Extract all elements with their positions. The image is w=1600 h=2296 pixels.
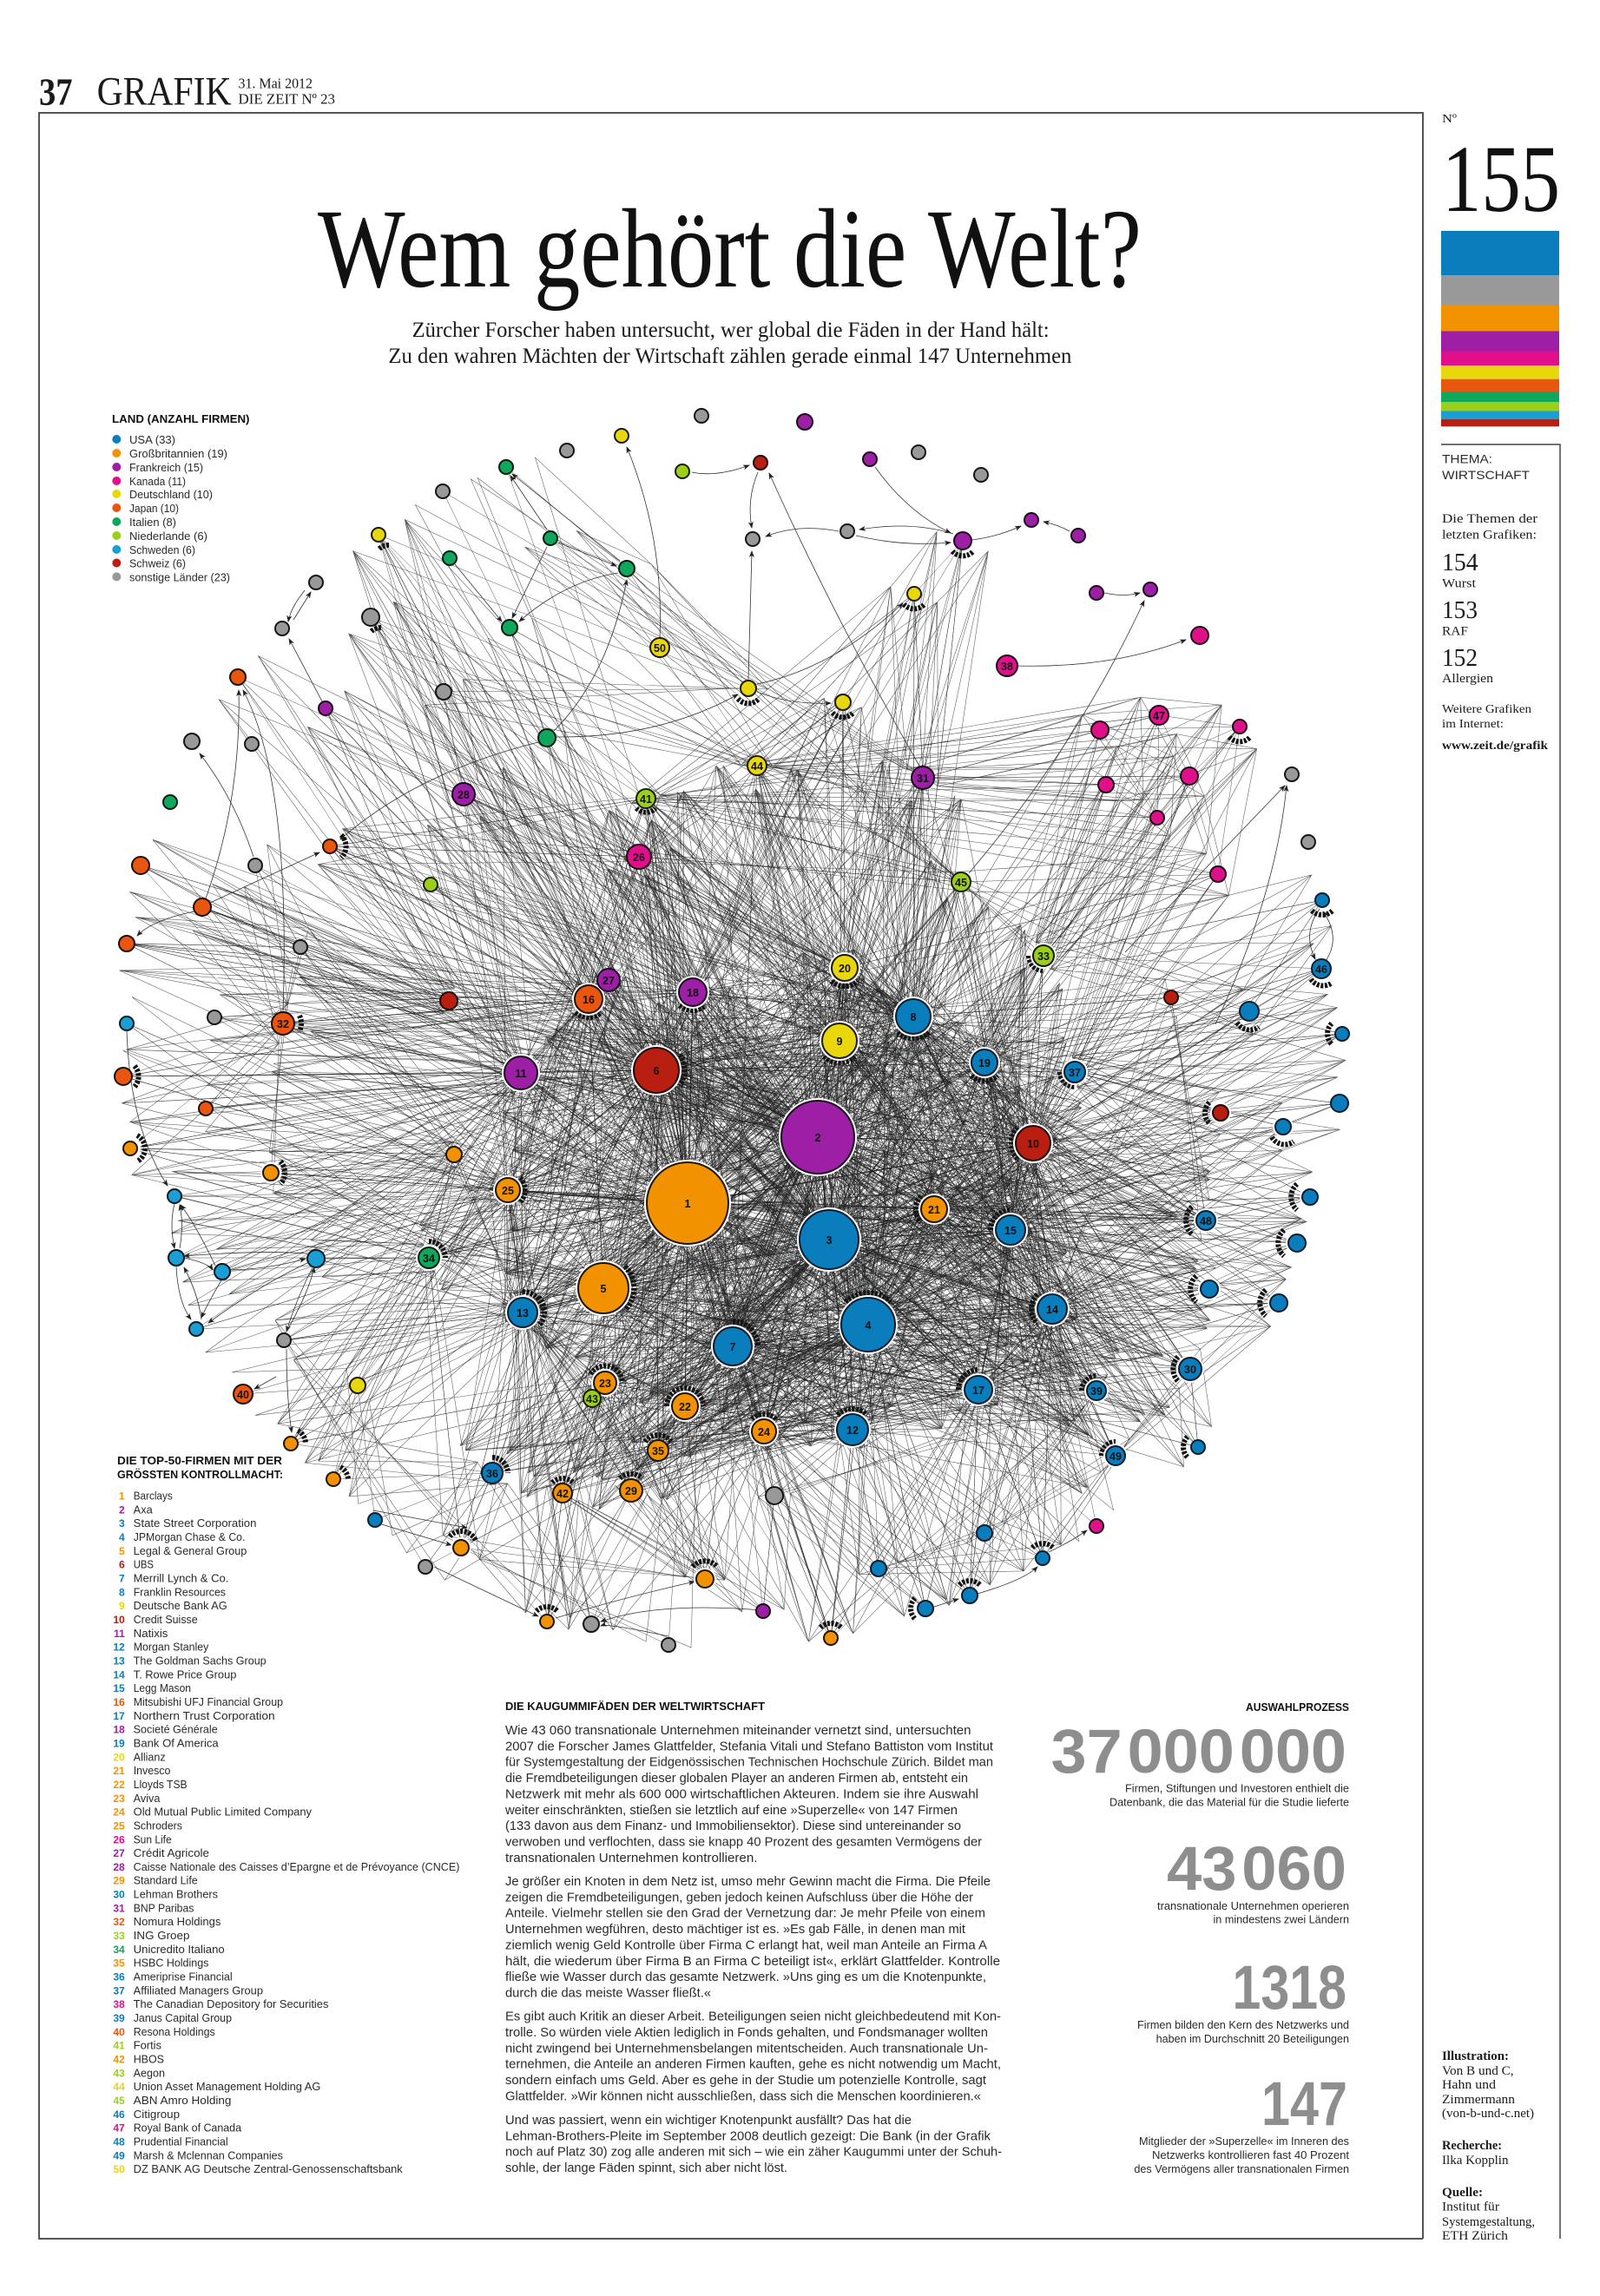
stat: 147: Mitglieder der »Superzelle« im Inneren des (1139, 2135, 1349, 2148)
list: Top 50 firms: 13 (113, 1655, 125, 1667)
list: Top 50 firms: Crédit Agricole (134, 1847, 209, 1859)
page header: 31. Mai 2012 (238, 76, 313, 92)
node rank numbers: 7 (730, 1341, 736, 1353)
stat: 147: des Vermögens aller transnationalen Firmen (1134, 2163, 1349, 2175)
list: Top 50 firms: HBOS (134, 2054, 164, 2066)
list: Top 50 firms: Barclays (134, 1490, 173, 1502)
node rank numbers: 49 (1109, 1451, 1122, 1463)
subtitle: Zu den wahren Mächten der Wirtschaft zählen gerade einmal 147 Unternehmen (388, 345, 1072, 368)
list: Top 50 firms: Nomura Holdings (134, 1916, 221, 1928)
list: Top 50 firms: Citigroup (134, 2109, 180, 2121)
list: Top 50 firms: Legg Mason (134, 1682, 191, 1694)
list: Top 50 firms: 5 (119, 1545, 125, 1557)
article: Die Kaugummifäden der Weltwirtschaft: Je größer ein Knoten in dem Netz ist, umso mehr Gewinn macht die Firma. Die Pfeile (505, 1875, 991, 1889)
sidebar: credits: Institut für (1442, 2200, 1499, 2214)
article: Die Kaugummifäden der Weltwirtschaft: Und was passiert, wenn ein wichtiger Knotenpunkt ausfällt? Das hat die (505, 2114, 912, 2128)
legend: Land (Anzahl Firmen): Kanada (11) (129, 476, 186, 488)
list: Top 50 firms: 38 (113, 1998, 125, 2010)
list: Top 50 firms: 24 (113, 1806, 125, 1819)
list: Top 50 firms: DIE TOP-50-FIRMEN MIT DER (117, 1454, 283, 1467)
list: Top 50 firms: 33 (113, 1930, 125, 1942)
list: Top 50 firms: 48 (113, 2135, 125, 2148)
list: Top 50 firms: 29 (113, 1875, 125, 1887)
sidebar: topic and previous graphics: 153 (1442, 597, 1478, 624)
node rank numbers: 12 (846, 1424, 859, 1437)
node rank numbers: 50 (654, 642, 666, 655)
node rank numbers: 10 (1027, 1138, 1039, 1150)
node rank numbers: 41 (640, 793, 652, 806)
page header (39, 69, 335, 114)
sidebar: topic and previous graphics: Wurst (1442, 576, 1477, 590)
nodes: Kanada (627, 627, 1247, 1533)
list: Top 50 firms: 23 (113, 1793, 125, 1805)
title: Wem gehört die Welt? (318, 187, 1142, 312)
node rank numbers: 21 (928, 1204, 940, 1216)
list: Top 50 firms: 3 (119, 1517, 125, 1530)
node rank numbers: 15 (1004, 1225, 1017, 1237)
list: Top 50 firms: ABN Amro Holding (134, 2095, 231, 2107)
list: Top 50 firms: Aegon (134, 2067, 165, 2079)
list: Top 50 firms: 14 (113, 1668, 125, 1681)
sidebar: topic and previous graphics: 154 (1442, 549, 1478, 576)
node rank numbers: 34 (423, 1253, 435, 1265)
nodes: sonstige Länder (184, 409, 1315, 1652)
list: Top 50 firms: 6 (119, 1559, 125, 1571)
edges: dense core (508, 968, 1052, 1431)
page header: DIE ZEIT Nº 23 (238, 91, 335, 108)
node rank numbers: 33 (1037, 951, 1050, 963)
article: Die Kaugummifäden der Weltwirtschaft: Es gibt auch Kritik an dieser Arbeit. Beteiligungen seien nicht gleichbedeutend mit Kon- (505, 2010, 1001, 2024)
sidebar: topic and previous graphics: WIRTSCHAFT (1442, 468, 1530, 482)
list: Top 50 firms: 22 (113, 1779, 125, 1791)
article: Die Kaugummifäden der Weltwirtschaft: sohle, der lange Fäden spinnt, sich aber nicht löst. (505, 2161, 787, 2175)
list: Top 50 firms: Invesco (134, 1765, 170, 1777)
list: Top 50 firms: 49 (113, 2149, 125, 2161)
list: Top 50 firms: 43 (113, 2067, 125, 2079)
stat: 43 060: in mindestens zwei Ländern (1214, 1913, 1349, 1925)
node rank numbers: 23 (599, 1378, 611, 1390)
list: Top 50 firms: Merrill Lynch & Co. (134, 1573, 228, 1585)
list: Top 50 firms: T. Rowe Price Group (134, 1668, 236, 1681)
stat: 1318: 1318 (1233, 1954, 1347, 2023)
list: Top 50 firms: 17 (113, 1710, 125, 1722)
list: Top 50 firms: Unicredito Italiano (134, 1944, 225, 1956)
node rank numbers: 36 (486, 1468, 498, 1480)
list: Top 50 firms: The Canadian Depository for Securities (134, 1998, 328, 2010)
list: Top 50 firms: Deutsche Bank AG (134, 1600, 227, 1612)
article: Die Kaugummifäden der Weltwirtschaft: Anteile. Vielmehr stellen sie den Grad der Vernetzung dar: Je mehr Pfeile von einem (505, 1907, 985, 1921)
stat: 43 060: 43 060 (1167, 1835, 1347, 1904)
legend: Land (Anzahl Firmen): sonstige Länder (23) (129, 571, 230, 583)
page header: 37 (39, 70, 73, 113)
sidebar: topic and previous graphics: letzten Grafiken: (1442, 528, 1537, 542)
sidebar: topic and previous graphics: www.zeit.de/grafik (1442, 740, 1548, 753)
article: Die Kaugummifäden der Weltwirtschaft: ziemlich wenig Geld Kontrolle über Firma C erlangt hat, weil man Anteile an Firma A (505, 1938, 987, 1952)
node rank numbers: 5 (601, 1283, 607, 1295)
nodes: Schweiz (440, 456, 1228, 1161)
stats: Auswahlprozess: AUSWAHLPROZESS (1246, 1701, 1349, 1714)
sidebar: topic and previous graphics: 152 (1442, 645, 1478, 672)
list: Top 50 firms: 4 (119, 1531, 125, 1543)
nodes: Italien (163, 460, 635, 1268)
list: Top 50 firms: 27 (113, 1847, 125, 1859)
node rank numbers: 46 (1315, 964, 1327, 976)
article: Die Kaugummifäden der Weltwirtschaft: nicht zwingend bei Unternehmensbelangen mitentscheiden. Auch transnationale Un- (505, 2042, 988, 2056)
article: Die Kaugummifäden der Weltwirtschaft: Lehman-Brothers-Pleite im September 2008 deutlich gezeigt: Die Bank (in der Grafik (505, 2129, 991, 2143)
list: Top 50 firms: Credit Suisse (134, 1614, 198, 1626)
nodes: Großbritannien (123, 1141, 947, 1645)
list: Top 50 firms: 8 (119, 1586, 125, 1598)
node rank numbers: 43 (586, 1393, 598, 1405)
node rank numbers: 29 (625, 1485, 637, 1497)
list: Top 50 firms: 7 (119, 1573, 125, 1585)
node rank numbers: 14 (1046, 1304, 1058, 1316)
article: Die Kaugummifäden der Weltwirtschaft: Wie 43 060 transnationale Unternehmen miteinander vernetzt sind, untersuchten (505, 1724, 971, 1738)
sidebar: issue number: Nº (1442, 113, 1458, 126)
node rank numbers: 13 (517, 1307, 529, 1319)
list: Top 50 firms: 19 (113, 1737, 125, 1749)
nodes: Frankreich (319, 414, 1157, 1618)
list: Top 50 firms: Mitsubishi UFJ Financial Group (134, 1696, 283, 1708)
node rank numbers: 27 (602, 975, 615, 987)
node rank numbers: 24 (758, 1426, 770, 1438)
list: Top 50 firms: 45 (113, 2095, 125, 2107)
list: Top 50 firms: Bank Of America (134, 1737, 219, 1749)
list: Top 50 firms: GRÖSSTEN KONTROLLMACHT: (117, 1468, 283, 1481)
node rank numbers: 38 (1001, 661, 1013, 673)
article: Die Kaugummifäden der Weltwirtschaft: zeigen die Fremdbeteiligungen, geben jedoch keinen Aufschluss über die Höhe der (505, 1891, 973, 1905)
sidebar: topic and previous graphics: Die Themen der (1442, 512, 1537, 526)
list: Top 50 firms (113, 1454, 459, 2175)
list: Top 50 firms: 18 (113, 1724, 125, 1736)
list: Top 50 firms: 15 (113, 1682, 125, 1694)
nodes: Schweden (120, 1016, 325, 1336)
node rank numbers: 39 (1090, 1385, 1103, 1398)
list: Top 50 firms: 30 (113, 1889, 125, 1901)
sidebar: topic and previous graphics (1442, 452, 1548, 753)
article: Die Kaugummifäden der Weltwirtschaft: fließe wie Wasser durch das gesamte Netzwerk. »Uns ging es um die Knotenpunkte, (505, 1970, 986, 1984)
stat: 147: Netzwerks kontrollieren fast 40 Prozent (1152, 2149, 1350, 2161)
article: Die Kaugummifäden der Weltwirtschaft: transnationalen Unternehmen kontrollieren. (505, 1852, 757, 1865)
list: Top 50 firms: 16 (113, 1696, 125, 1708)
node rank numbers: 18 (687, 987, 699, 999)
article: Die Kaugummifäden der Weltwirtschaft: (133 davon aus dem Finanz- und Immobiliensektor). Diese sind untereinander so (505, 1819, 961, 1833)
stat: 37 000 000: Firmen, Stiftungen und Investoren enthielt die (1125, 1783, 1349, 1795)
sidebar: credits: Hahn und (1442, 2078, 1497, 2092)
list: Top 50 firms: 25 (113, 1819, 125, 1832)
node rank numbers: 42 (556, 1488, 569, 1500)
list: Top 50 firms: 11 (114, 1628, 125, 1640)
node rank numbers: 37 (1069, 1067, 1081, 1079)
list: Top 50 firms: 9 (119, 1600, 125, 1612)
list: Top 50 firms: 12 (113, 1641, 125, 1654)
legend: Land (Anzahl Firmen): Japan (10) (129, 503, 179, 515)
edges: middle ring (283, 766, 1206, 1493)
article: Die Kaugummifäden der Weltwirtschaft: trolle. So würden viele Aktien lediglich in Fonds gehalten, und Fondsmanager wollten (505, 2026, 988, 2040)
list: Top 50 firms: Sun Life (134, 1833, 172, 1845)
legend: Land (Anzahl Firmen): Schweiz (6) (129, 557, 186, 569)
list: Top 50 firms: Allianz (134, 1751, 166, 1763)
list: Top 50 firms: Union Asset Management Holding AG (134, 2081, 320, 2093)
arrowhead clusters around nodes (135, 545, 1333, 1628)
list: Top 50 firms: 10 (113, 1614, 125, 1626)
node rank numbers: 2 (815, 1132, 821, 1144)
list: Top 50 firms: JPMorgan Chase & Co. (134, 1531, 245, 1543)
list: Top 50 firms: 2 (119, 1503, 125, 1516)
article: Die Kaugummifäden der Weltwirtschaft (504, 1700, 1002, 2175)
list: Top 50 firms: 1 (119, 1490, 125, 1502)
sidebar: topic and previous graphics: RAF (1442, 625, 1468, 639)
list: Top 50 firms: Marsh & Mclennan Companies (134, 2149, 283, 2161)
nodes: Deutschland (350, 429, 921, 1393)
article: Die Kaugummifäden der Weltwirtschaft: sondern einfach ums Geld. Aber es gehe in der Studie um potenzielle Kontrolle, sagt (505, 2074, 986, 2088)
peripheral curved arrows (127, 447, 1333, 1636)
stat: 1318 (1137, 1954, 1349, 2045)
sidebar: issue number: 155 (1442, 126, 1560, 232)
list: Top 50 firms: 36 (113, 1971, 125, 1984)
legend: Land (Anzahl Firmen): Deutschland (10) (129, 489, 213, 501)
list: Top 50 firms: 37 (113, 1984, 125, 1997)
stat: 147: 147 (1261, 2070, 1347, 2139)
list: Top 50 firms: State Street Corporation (134, 1517, 256, 1530)
node rank numbers: 47 (1153, 710, 1165, 722)
node rank numbers: 32 (277, 1018, 289, 1030)
node rank numbers: 19 (978, 1057, 991, 1069)
node rank numbers: 4 (866, 1319, 872, 1332)
article: Die Kaugummifäden der Weltwirtschaft: die Fremdbeteiligungen dieser globalen Player an anderen Firmen ab, entsteht ein (505, 1772, 968, 1786)
sidebar: credits: Quelle: (1442, 2186, 1483, 2200)
node rank numbers: 22 (679, 1401, 691, 1413)
node rank numbers: 6 (654, 1065, 660, 1077)
list: Top 50 firms: Franklin Resources (134, 1586, 226, 1598)
list: Top 50 firms: 32 (113, 1916, 125, 1928)
node rank numbers: 40 (237, 1389, 249, 1401)
network graph (95, 409, 1367, 1671)
sidebar: colour proportion bar (1441, 231, 1559, 426)
list: Top 50 firms: HSBC Holdings (134, 1957, 208, 1970)
list: Top 50 firms: Standard Life (134, 1875, 198, 1887)
list: Top 50 firms: ING Groep (134, 1930, 189, 1942)
list: Top 50 firms: 41 (113, 2040, 125, 2052)
legend: Land (Anzahl Firmen): USA (33) (129, 434, 175, 446)
stats: Auswahlprozess (1050, 1701, 1350, 2175)
list: Top 50 firms: 40 (113, 2026, 125, 2038)
edges: extra density layers (95, 441, 1367, 1671)
article: Die Kaugummifäden der Weltwirtschaft: Unternehmen wegführen, desto mächtiger ist es. »Es gab Fälle, in denen man mit (505, 1923, 965, 1937)
node rank numbers: 3 (826, 1234, 833, 1247)
node rank numbers: 9 (837, 1036, 843, 1048)
list: Top 50 firms: Royal Bank of Canada (134, 2122, 241, 2135)
list: Top 50 firms: 39 (113, 2012, 125, 2024)
node rank numbers (237, 642, 1327, 1500)
sidebar: credits: ETH Zürich (1442, 2229, 1509, 2243)
list: Top 50 firms: 47 (113, 2122, 125, 2135)
subtitle (388, 319, 1072, 368)
node rank numbers: 31 (917, 773, 929, 785)
node rank numbers: 16 (583, 994, 595, 1006)
list: Top 50 firms: Legal & General Group (134, 1545, 247, 1557)
list: Top 50 firms: 46 (113, 2109, 125, 2121)
node rank numbers: 44 (751, 760, 763, 773)
list: Top 50 firms: Lloyds TSB (134, 1779, 188, 1791)
list: Top 50 firms: 28 (113, 1861, 125, 1873)
sidebar: credits: Von B und C, (1442, 2064, 1514, 2078)
legend: Land (Anzahl Firmen): Großbritannien (19) (129, 448, 227, 460)
node rank numbers: 26 (633, 852, 645, 864)
list: Top 50 firms: Caisse Nationale des Caisses d’Epargne et de Prévoyance (CNCE) (134, 1861, 459, 1873)
list: Top 50 firms: Janus Capital Group (134, 2012, 232, 2024)
list: Top 50 firms: BNP Paribas (134, 1902, 194, 1914)
stat: 43 060: transnationale Unternehmen operieren (1157, 1900, 1349, 1912)
list: Top 50 firms: Aviva (134, 1793, 160, 1805)
sidebar: topic and previous graphics: Weitere Grafiken (1442, 703, 1531, 716)
article: Die Kaugummifäden der Weltwirtschaft: durch die das meiste Wasser fließt.« (505, 1986, 711, 2000)
sidebar: credits: Zimmermann (1442, 2093, 1516, 2107)
legend: Land (Anzahl Firmen): Frankreich (15) (129, 462, 203, 474)
list: Top 50 firms: The Goldman Sachs Group (134, 1655, 267, 1667)
sidebar: credits: Recherche: (1442, 2139, 1502, 2153)
node rank numbers: 30 (1184, 1364, 1196, 1376)
sidebar: topic and previous graphics: THEMA: (1442, 452, 1492, 466)
article: Die Kaugummifäden der Weltwirtschaft: 2007 die Forscher James Glattfelder, Stefania Vitali und Stefano Battiston vom Institut (505, 1740, 993, 1753)
white halos around top-50 nodes (120, 943, 1320, 1590)
node rank numbers: 35 (652, 1445, 664, 1457)
sidebar: credits: Illustration: (1442, 2049, 1509, 2063)
list: Top 50 firms: Resona Holdings (134, 2026, 215, 2038)
sidebar: topic and previous graphics: Allergien (1442, 672, 1494, 686)
list: Top 50 firms: Societé Générale (134, 1724, 218, 1736)
stat: 1318: haben im Durchschnitt 20 Beteiligungen (1156, 2033, 1349, 2045)
legend: Land (Anzahl Firmen): Italien (8) (129, 516, 176, 529)
edges: outer fans (123, 467, 1342, 1645)
legend: Land (Anzahl Firmen) (112, 412, 250, 583)
node rank numbers: 25 (502, 1185, 514, 1197)
article: Die Kaugummifäden der Weltwirtschaft: hält, die wiederum über Firma B an Firma C beteiligt ist«, erklärt Glattfelder. Kontrolle (505, 1955, 1000, 1969)
list: Top 50 firms: 21 (113, 1765, 125, 1777)
list: Top 50 firms: 50 (113, 2163, 125, 2175)
stat: 43 060 (1157, 1835, 1349, 1925)
list: Top 50 firms: Schroders (134, 1819, 182, 1832)
legend: Land (Anzahl Firmen): LAND (ANZAHL FIRMEN) (112, 412, 250, 425)
article: Die Kaugummifäden der Weltwirtschaft: verwoben und verflochten, dass sie knapp 40 Prozent des gesamten Vermögens der (505, 1835, 982, 1849)
list: Top 50 firms: 31 (113, 1902, 125, 1914)
sidebar: credits: (von-b-und-c.net) (1442, 2107, 1534, 2121)
list: Top 50 firms: 35 (113, 1957, 125, 1970)
list: Top 50 firms: Fortis (134, 2040, 161, 2052)
nodes: USA (368, 893, 1349, 1616)
article: Die Kaugummifäden der Weltwirtschaft: Netzwerk mit mehr als 600 000 wirtschaftlichen Akteuren. Indem sie ihre Auswahl (505, 1787, 978, 1801)
list: Top 50 firms: Affiliated Managers Group (134, 1984, 263, 1997)
list: Top 50 firms: 26 (113, 1833, 125, 1845)
stat: 37 000 000: Datenbank, die das Material für die Studie lieferte (1109, 1797, 1349, 1809)
list: Top 50 firms: Morgan Stanley (134, 1641, 209, 1654)
list: Top 50 firms: Northern Trust Corporation (134, 1710, 275, 1722)
list: Top 50 firms: Natixis (134, 1628, 168, 1640)
sidebar: credits: Systemgestaltung, (1442, 2215, 1535, 2229)
nodes: Japan (115, 669, 602, 1404)
list: Top 50 firms: Lehman Brothers (134, 1889, 218, 1901)
list: Top 50 firms: 42 (113, 2054, 125, 2066)
stat: 147 (1134, 2070, 1350, 2175)
list: Top 50 firms: Ameriprise Financial (134, 1971, 233, 1984)
sidebar frame (1441, 444, 1560, 2239)
sidebar: credits (1442, 2049, 1535, 2243)
list: Top 50 firms: 20 (113, 1751, 125, 1763)
node rank numbers: 17 (972, 1385, 984, 1397)
list: Top 50 firms: 34 (113, 1944, 125, 1956)
list: Top 50 firms: DZ BANK AG Deutsche Zentral-Genossenschaftsbank (134, 2163, 403, 2175)
sidebar: credits: Ilka Kopplin (1442, 2154, 1509, 2168)
stat: 1318: Firmen bilden den Kern des Netzwerks und (1137, 2019, 1349, 2031)
list: Top 50 firms: UBS (134, 1559, 154, 1571)
nodes: Niederlande (424, 464, 1054, 1407)
article: Die Kaugummifäden der Weltwirtschaft: Glattfelder. »Wir können nicht ausschließen, dass sich die Menschen koordinieren.« (505, 2089, 981, 2103)
subtitle: Zürcher Forscher haben untersucht, wer global die Fäden in der Hand hält: (412, 319, 1050, 342)
legend: Land (Anzahl Firmen): Niederlande (6) (129, 530, 207, 543)
list: Top 50 firms: Axa (134, 1503, 153, 1516)
article: Die Kaugummifäden der Weltwirtschaft: ternehmen, die Anteile an anderen Firmen kauften, gehe es nicht notwendig um Macht, (505, 2058, 1001, 2072)
article: Die Kaugummifäden der Weltwirtschaft: DIE KAUGUMMIFÄDEN DER WELTWIRTSCHAFT (505, 1700, 765, 1713)
node rank numbers: 28 (458, 789, 470, 801)
legend: Land (Anzahl Firmen): Schweden (6) (129, 544, 195, 556)
node rank numbers: 8 (911, 1011, 917, 1023)
node rank numbers: 48 (1200, 1215, 1212, 1227)
article: Die Kaugummifäden der Weltwirtschaft: noch auf Platz 30) zog alle anderen mit sich – wie ein zäher Kaugummi unter der Schuh- (505, 2146, 1002, 2160)
list: Top 50 firms: 44 (113, 2081, 125, 2093)
article: Die Kaugummifäden der Weltwirtschaft: für Systemgestaltung der Eidgenössischen Technischen Hochschule Zürich. Bildet man (505, 1756, 993, 1770)
page header: GRAFIK (97, 69, 232, 114)
article: Die Kaugummifäden der Weltwirtschaft: weiter einschränkten, stießen sie letztlich auf eine »Superzelle« von 147 Firmen (504, 1804, 958, 1818)
node rank numbers: 11 (515, 1068, 527, 1080)
node rank numbers: 1 (685, 1198, 691, 1210)
node rank numbers: 20 (839, 963, 851, 975)
sidebar: topic and previous graphics: im Internet: (1442, 718, 1504, 731)
stat: 37 000 000: 37 000 000 (1050, 1718, 1347, 1786)
list: Top 50 firms: Prudential Financial (134, 2135, 228, 2148)
list: Top 50 firms: Old Mutual Public Limited Company (134, 1806, 313, 1819)
node rank numbers: 45 (955, 877, 967, 889)
